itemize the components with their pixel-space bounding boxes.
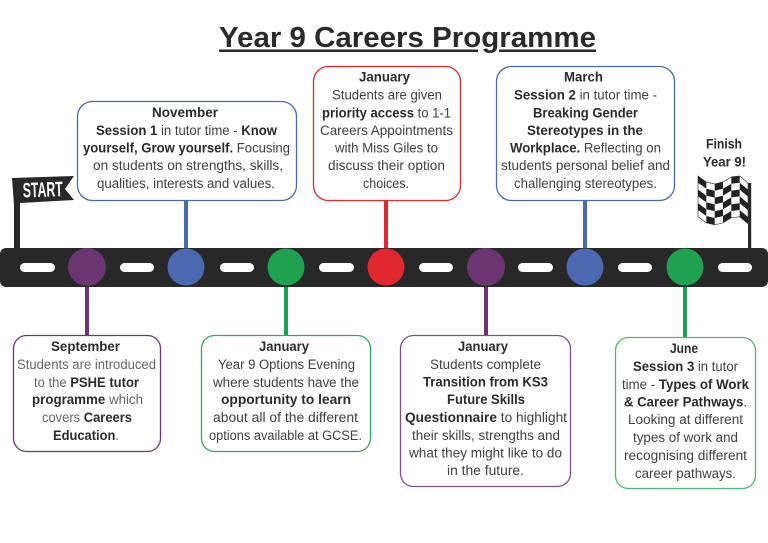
panel: January questionnaire: Questionnaire to highlight: [405, 410, 567, 425]
connector: January questionnaire: [484, 284, 488, 336]
marker: June: [666, 248, 704, 286]
panel: March: Breaking Gender: [533, 106, 639, 120]
panel: September: covers Careers: [42, 410, 132, 425]
marker: March: [566, 248, 604, 286]
connector: June: [683, 284, 687, 338]
marker: September: [68, 248, 106, 286]
panel: June: & Career Pathways.: [624, 394, 747, 410]
connector: January priority access: [384, 200, 388, 252]
panel: January questionnaire: their skills, strengths and: [412, 428, 560, 443]
finish label: [703, 136, 746, 170]
marker: January questionnaire: [467, 248, 505, 286]
panel: January options evening: Year 9 Options Evening: [218, 357, 355, 372]
icon: start flag: [12, 176, 74, 249]
panel: March: Stereotypes in the: [527, 123, 643, 138]
connector: January options evening: [284, 284, 288, 336]
panel: March: challenging stereotypes.: [514, 176, 657, 191]
marker: January priority access: [368, 248, 404, 286]
panel: September: Education.: [53, 428, 119, 443]
connector: March: [583, 200, 587, 252]
panel: March: Session 2 in tutor time -: [514, 88, 657, 102]
panel: November: on students on strengths, skills,: [93, 158, 283, 173]
panel: January priority access: priority access to 1-1: [322, 106, 451, 120]
finish label: Year 9!: [703, 154, 746, 170]
title: Year 9 Careers Programme: [219, 22, 596, 54]
panel: January options evening: opportunity to learn: [221, 392, 351, 407]
panel: September: [14, 336, 160, 452]
panel: June: recognising different: [624, 448, 747, 463]
panel: June: types of work and: [633, 430, 738, 445]
panel: September: to the PSHE tutor: [34, 375, 140, 390]
marker: January options evening: [268, 248, 304, 286]
panel: November: [78, 102, 296, 200]
panel: November: yourself, Grow yourself. Focusing: [83, 140, 290, 156]
panel: November: Session 1 in tutor time - Know: [96, 123, 277, 138]
connector: September: [85, 284, 89, 336]
panel: January questionnaire: Transition from KS3: [423, 374, 548, 390]
panel: September: September: [51, 339, 121, 354]
panel: June: June: [670, 341, 698, 356]
panel: March: March: [564, 70, 603, 84]
panel: January priority access: with Miss Giles to: [334, 140, 438, 156]
panel: March: students personal belief and: [501, 158, 670, 173]
panel: January priority access: [314, 66, 460, 200]
panel: June: Session 3 in tutor: [633, 359, 738, 374]
panel: January questionnaire: January: [458, 339, 508, 354]
panel: June: time - Types of Work: [622, 377, 749, 392]
icon: start flag: START: [22, 178, 63, 202]
panel: June: Looking at different: [628, 412, 743, 427]
panel: January questionnaire: [400, 336, 570, 486]
panel: January options evening: January: [259, 339, 309, 354]
marker: November: [168, 248, 204, 286]
panel: January priority access: discuss their option: [328, 158, 445, 173]
panel: January questionnaire: in the future.: [447, 463, 524, 478]
panel: January options evening: about all of the different: [213, 410, 358, 425]
timeline road: [0, 248, 768, 287]
connector: November: [184, 200, 188, 252]
panel: January priority access: Careers Appointments: [320, 123, 453, 138]
panel: March: Workplace. Reflecting on: [510, 140, 661, 156]
panel: September: Students are introduced: [17, 357, 156, 372]
panel: January questionnaire: what they might like to do: [408, 446, 562, 460]
panel: January questionnaire: Future Skills: [447, 392, 525, 407]
panel: June: career pathways.: [635, 466, 736, 481]
icon: chequered finish flag: [698, 176, 751, 249]
panel: January options evening: where students have the: [212, 375, 359, 390]
panel: January questionnaire: Students complete: [430, 357, 541, 372]
panel: January options evening: options available at GCSE.: [209, 428, 362, 443]
panel: March: [496, 66, 674, 200]
panel: January priority access: choices.: [363, 176, 409, 191]
panel: November: qualities, interests and values.: [97, 176, 275, 191]
panel: November: November: [152, 105, 219, 120]
panel: January options evening: [202, 336, 370, 452]
panel: January priority access: January: [359, 70, 410, 84]
panel: September: programme which: [32, 392, 143, 407]
panel: January priority access: Students are given: [332, 88, 442, 102]
panel: June: [616, 338, 756, 488]
finish label: Finish: [706, 136, 742, 152]
